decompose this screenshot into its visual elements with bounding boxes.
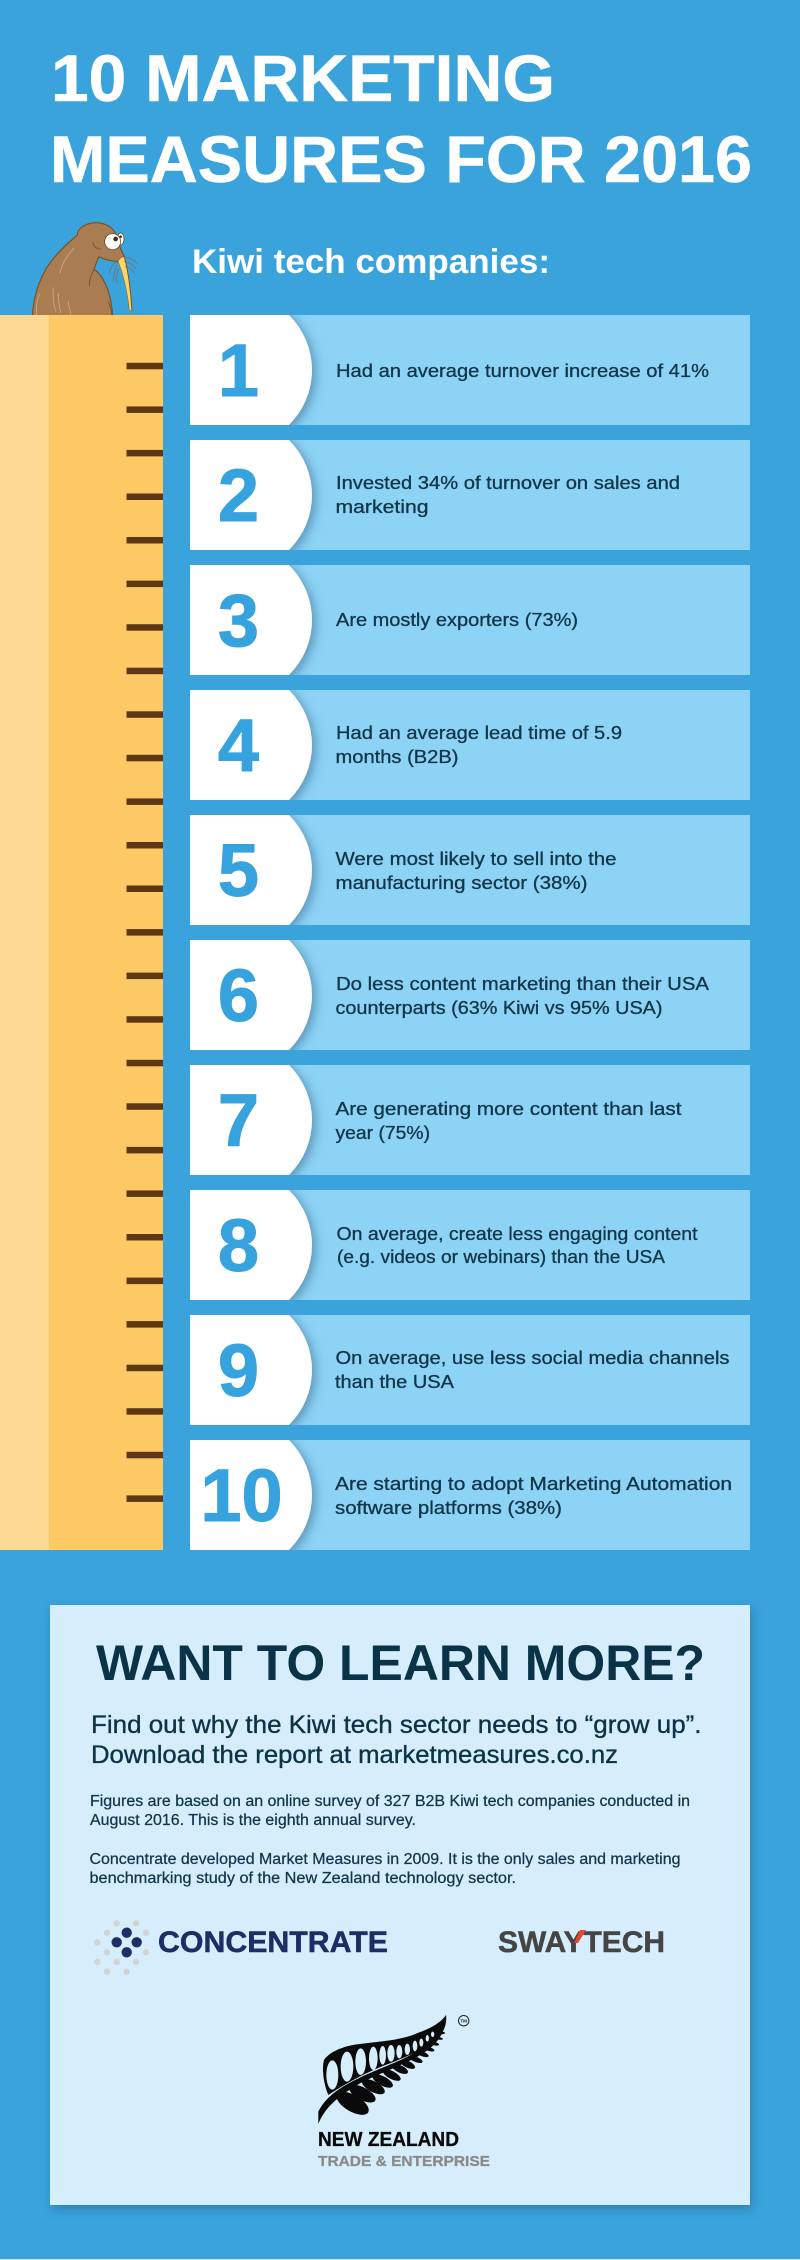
card 9 bbox=[158, 1293, 750, 1447]
number 8: 8 bbox=[218, 1204, 259, 1287]
card 1 bbox=[158, 293, 750, 447]
text: card 5: manufacturing sector (38%) bbox=[336, 873, 588, 893]
text: card 10: Are starting to adopt Marketing Automation bbox=[335, 1474, 732, 1494]
text: card 8: On average, create less engaging content bbox=[336, 1224, 698, 1244]
text: card 10: software platforms (38%) bbox=[335, 1498, 562, 1518]
text: card 2: marketing bbox=[336, 497, 428, 517]
icon: silver fern bbox=[318, 2015, 446, 2124]
number 2: 2 bbox=[218, 454, 259, 537]
text: card 9: On average, use less social media channels bbox=[336, 1348, 730, 1368]
text: card 7: year (75%) bbox=[336, 1123, 430, 1143]
card 6 bbox=[158, 918, 750, 1072]
text: card 2: Invested 34% of turnover on sales and bbox=[336, 473, 680, 493]
number 4: 4 bbox=[218, 704, 259, 787]
text: survey note: August 2016. This is the eighth annual survey. bbox=[90, 1812, 416, 1829]
text: card 9: than the USA bbox=[335, 1372, 454, 1392]
card 10 bbox=[158, 1418, 750, 1572]
card 3 bbox=[158, 543, 750, 697]
title: 10 MARKETING bbox=[51, 41, 555, 115]
icon: kiwi bird bbox=[32, 223, 138, 317]
number 5: 5 bbox=[218, 829, 259, 912]
logo: New Zealand Trade & Enterprise: TRADE & ENTERPRISE bbox=[318, 2153, 490, 2170]
number 10: 10 bbox=[200, 1454, 283, 1537]
text: card 6: counterparts (63% Kiwi vs 95% USA) bbox=[336, 998, 662, 1018]
text: card 6 bbox=[336, 974, 709, 1018]
text: card 7: Are generating more content than last bbox=[336, 1099, 682, 1119]
number 7: 7 bbox=[218, 1079, 259, 1162]
icon: trademark: TM bbox=[460, 2018, 467, 2023]
text: card 4 bbox=[336, 723, 622, 767]
text: card 1: Had an average turnover increase of 41% bbox=[336, 361, 709, 381]
text: card 4: months (B2B) bbox=[336, 747, 458, 767]
card 8 bbox=[158, 1168, 750, 1322]
text: download call to action bbox=[91, 1711, 702, 1769]
icon: trademark bbox=[458, 2016, 469, 2026]
panel: want to learn more bbox=[50, 1605, 750, 2205]
text: card 8: (e.g. videos or webinars) than the USA bbox=[337, 1247, 665, 1267]
text: download call to action: Download the report at marketmeasures.co.nz bbox=[91, 1741, 618, 1769]
text: card 7 bbox=[336, 1099, 682, 1143]
text: card 10 bbox=[335, 1474, 732, 1518]
number 6: 6 bbox=[218, 954, 259, 1037]
text: card 3: Are mostly exporters (73%) bbox=[336, 610, 578, 630]
text: card 2 bbox=[336, 473, 680, 517]
text: about Market Measures: benchmarking study of the New Zealand technology sector. bbox=[90, 1870, 516, 1887]
text: card 5 bbox=[336, 849, 616, 893]
logo: Concentrate bbox=[94, 1920, 388, 1975]
title bbox=[50, 41, 752, 196]
heading: want to learn more: WANT TO LEARN MORE? bbox=[96, 1635, 705, 1691]
card 5 bbox=[158, 793, 750, 947]
number 1: 1 bbox=[218, 329, 259, 412]
ruler bbox=[0, 315, 163, 1550]
logo: Swaytech: SWAYTECH bbox=[498, 1926, 665, 1959]
text: download call to action: Find out why the Kiwi tech sector needs to “grow up”. bbox=[91, 1711, 702, 1739]
text: card 5: Were most likely to sell into the bbox=[336, 849, 616, 869]
text: about Market Measures: Concentrate developed Market Measures in 2009. It is the only sales and marketing bbox=[90, 1851, 680, 1868]
card 7 bbox=[158, 1043, 750, 1197]
text: card 9 bbox=[335, 1348, 730, 1392]
text: survey note: Figures are based on an online survey of 327 B2B Kiwi tech companies conducted in bbox=[90, 1793, 690, 1810]
number 3: 3 bbox=[218, 579, 259, 662]
text: about Market Measures bbox=[90, 1851, 680, 1887]
number 9: 9 bbox=[218, 1329, 259, 1412]
logo: Concentrate: CONCENTRATE bbox=[158, 1926, 388, 1959]
logo: New Zealand Trade & Enterprise bbox=[318, 2015, 490, 2170]
text: survey note bbox=[90, 1793, 690, 1829]
title: MEASURES FOR 2016 bbox=[50, 122, 752, 196]
card 2 bbox=[158, 418, 750, 572]
card 4 bbox=[158, 668, 750, 822]
heading: Kiwi tech companies: Kiwi tech companies: bbox=[192, 243, 550, 281]
text: card 6: Do less content marketing than their USA bbox=[336, 974, 709, 994]
text: card 4: Had an average lead time of 5.9 bbox=[336, 723, 622, 743]
logo: New Zealand Trade & Enterprise: NEW ZEALAND bbox=[318, 2129, 459, 2151]
text: card 8 bbox=[336, 1224, 698, 1267]
